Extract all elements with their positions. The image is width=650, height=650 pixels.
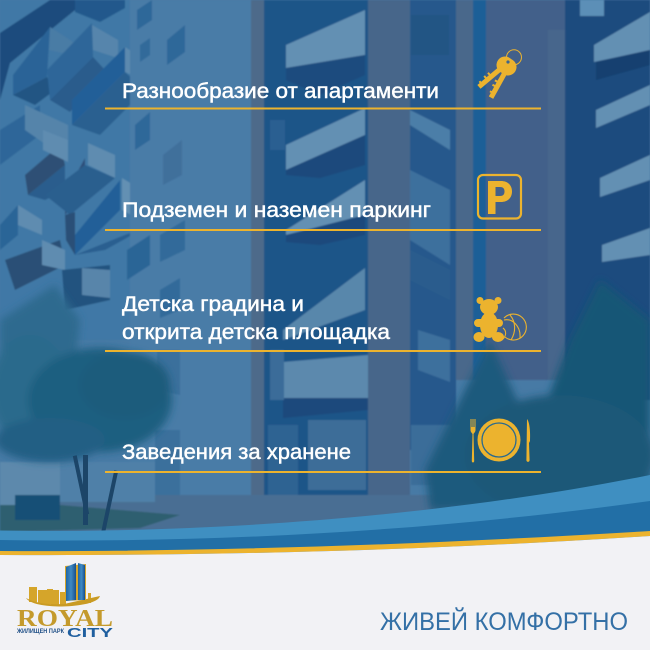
logo city: CITY: [67, 626, 114, 640]
row 1 heading: Разнообразие от апартаменти: [122, 80, 439, 103]
row 1 divider: [105, 108, 541, 110]
brick column 2: [456, 0, 475, 380]
row 2 heading: Подземен и наземен паркинг: [122, 199, 431, 222]
logo wordmark: ROYAL: [17, 606, 113, 632]
central light wall with windows: [130, 0, 255, 500]
ground: [0, 495, 450, 545]
footer panel: [0, 536, 650, 650]
logo ellipse: [26, 596, 100, 606]
trees: [0, 280, 650, 515]
icon: plate with fork and knife: [470, 418, 530, 462]
brick pillar 1: [251, 0, 265, 505]
wave band: light blue: [0, 475, 650, 560]
right balconies zone: [565, 0, 650, 400]
wave band: dark blue: [0, 501, 650, 560]
row 4 heading: Заведения за хранене: [122, 441, 351, 464]
brick column: [368, 0, 410, 510]
icon: parking sign: [478, 175, 521, 218]
row 3 heading: Детска градина и: [122, 293, 304, 316]
wave band: gold: [0, 531, 650, 555]
row 3 heading: открита детска площадка: [122, 321, 390, 344]
logo subtitle: ЖИЛИЩЕН ПАРК: [16, 628, 64, 635]
row 4 divider: [105, 471, 541, 473]
balcony column: [264, 0, 369, 505]
logo tower: [65, 563, 86, 601]
windows column: [410, 0, 456, 450]
logo: Royal City: [16, 563, 114, 640]
row 2 divider: [105, 229, 541, 231]
icon: keys: [473, 50, 522, 102]
big brown wall: [486, 0, 570, 380]
slogan: ЖИВЕЙ КОМФОРТНО: [380, 606, 628, 636]
left balconies zone: [0, 0, 130, 340]
tree trunks: [73, 455, 118, 535]
row 3 divider: [105, 350, 541, 352]
logo skyline: [29, 587, 91, 605]
icon: teddy bear and ball: [474, 297, 526, 342]
